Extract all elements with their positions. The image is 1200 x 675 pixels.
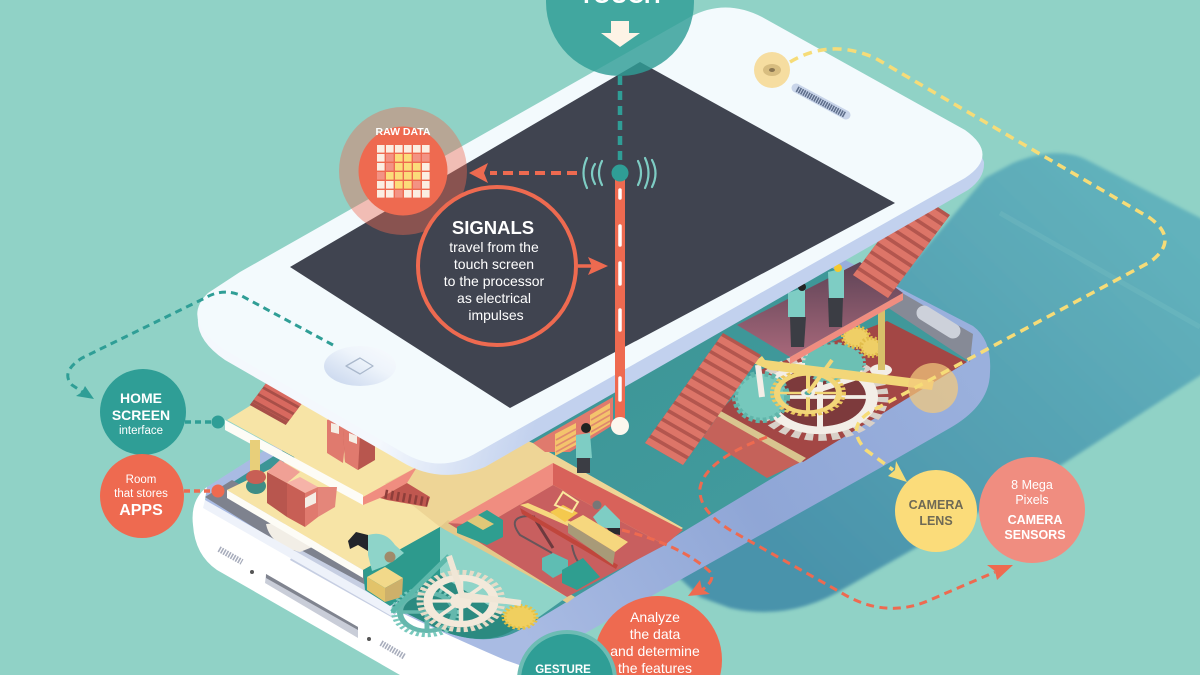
camera sensors circle [979,457,1085,563]
teal dashed home path [68,292,333,399]
room floor [448,485,665,597]
red beam [520,508,618,569]
plate underside pink [363,467,417,505]
mint wall [440,527,567,627]
red dashed path to analyze [622,530,712,596]
signals callout: impulses [468,307,524,323]
camera module circle [908,363,958,413]
salmon block [703,413,803,478]
pillar left [250,440,260,474]
icon: down arrow [601,21,640,47]
screen [290,62,895,408]
camera sensors circle: 8 Mega [1011,478,1053,492]
camera lens circle: CAMERA [909,498,963,512]
signals callout: to the processor [444,273,545,289]
cream gear [420,572,502,630]
apps connector [184,484,224,498]
arm [533,516,553,548]
chair [550,492,578,522]
signals callout: as electrical [457,290,531,306]
teal gear left [735,374,787,420]
small yellow gears [843,327,881,356]
analyze circle: Analyze [630,609,680,625]
home connector [185,416,224,428]
tan strip [440,520,575,603]
interior floor [208,190,972,639]
home screen circle: SCREEN [112,407,170,423]
pedestal [542,553,568,578]
plate top [227,375,480,495]
home screen circle: HOME [120,390,162,406]
analyze circle [594,596,722,675]
room: gear [348,527,567,639]
tan floor [227,400,683,597]
slab top [197,8,983,464]
camera sensors circle: SENSORS [1004,528,1066,542]
phone base [193,180,990,675]
front camera [754,52,790,88]
cables [515,516,592,575]
yellow bar [753,356,934,390]
screen slab [197,8,984,475]
stacks of cabinets lower [267,460,337,527]
home screen circle [100,369,186,455]
stacks of cabinets upper [327,417,375,470]
person left [788,283,806,347]
drawer top [568,515,628,552]
touch node [612,164,628,182]
yellow gear [773,371,843,415]
gear floor [392,575,520,639]
upper platform [737,262,903,357]
pixel grid [377,145,430,198]
lighter left floor [227,440,440,570]
lower yellow floor [227,400,683,597]
camera lens circle [895,470,977,552]
dark teal wall [363,527,440,606]
signals callout [418,187,576,345]
cream battery shape [266,523,330,552]
signal bar [611,174,629,435]
analyze circle: and determine [610,643,700,659]
red dashed path to sensors [700,437,1013,608]
left pink wall [448,463,553,525]
phone cast shadow [660,153,1200,612]
right wall [553,463,683,545]
apps circle: that stores [114,488,168,500]
yellow box [367,567,403,602]
home screen circle: interface [119,425,163,437]
raw data circle [339,107,467,235]
top left stairs [250,382,303,425]
pillar base [246,470,266,494]
apps circle: APPS [119,502,163,519]
red dashed arrow to raw data [469,163,577,183]
slab side [198,140,984,475]
white arm [758,365,860,397]
signals arrow [578,257,608,275]
touch circle [546,0,694,76]
platform edge [790,293,903,364]
top speaker [796,88,846,115]
tan ledge [714,409,806,463]
white ratchet gear [758,357,882,437]
teal gear [394,589,460,635]
front connector slot [265,574,358,638]
teal boxes [457,510,503,545]
plate edge [225,420,363,505]
apps circle [100,454,184,538]
front speaker right [381,643,405,657]
gesture circle [519,632,615,675]
front speaker left [219,549,242,562]
gear arms [449,556,521,603]
teal gear back [805,344,863,382]
kneeling man [348,532,404,571]
base lavender rim and side [205,180,990,667]
worker at wall [576,423,592,473]
big stairs [645,333,761,465]
signals callout: touch screen [454,256,534,272]
dark teal block [562,558,600,590]
camera sensors circle: CAMERA [1008,513,1062,527]
small yellow gear [504,606,536,628]
yellow dashed camera path [790,49,1165,482]
base white front side [193,487,560,675]
drawer front [568,523,615,565]
yellow beam top [520,503,583,530]
camera lens circle: LENS [919,514,953,528]
white rim ledge [203,500,395,618]
raw data circle: RAW DATA [375,126,431,138]
upper yellow plate [225,375,480,527]
camera sensors circle: Pixels [1015,493,1049,507]
lavender inner ledge [290,548,402,618]
worker [592,500,620,535]
upper right stairs [853,192,950,298]
teal arm [392,556,449,612]
signal waves [584,158,656,188]
signals callout: SIGNALS [452,217,534,238]
teal dashed touch line [618,76,622,160]
analyze circle: the data [630,626,681,642]
grey left interior [205,480,400,606]
dark red floor [718,321,967,462]
right room [645,192,973,478]
yellow arm [808,360,832,393]
apps circle: Room [126,474,156,486]
home button [324,346,396,386]
person right [828,264,844,327]
room: processor [440,463,683,603]
grey mute switch [924,313,953,331]
lower plate front edge [227,490,363,578]
underside stairs [380,483,430,507]
back wall with blinds [533,397,613,456]
pillar [870,310,892,376]
switch housing [887,290,973,362]
front screws [250,570,371,641]
signals callout: travel from the [449,239,539,255]
